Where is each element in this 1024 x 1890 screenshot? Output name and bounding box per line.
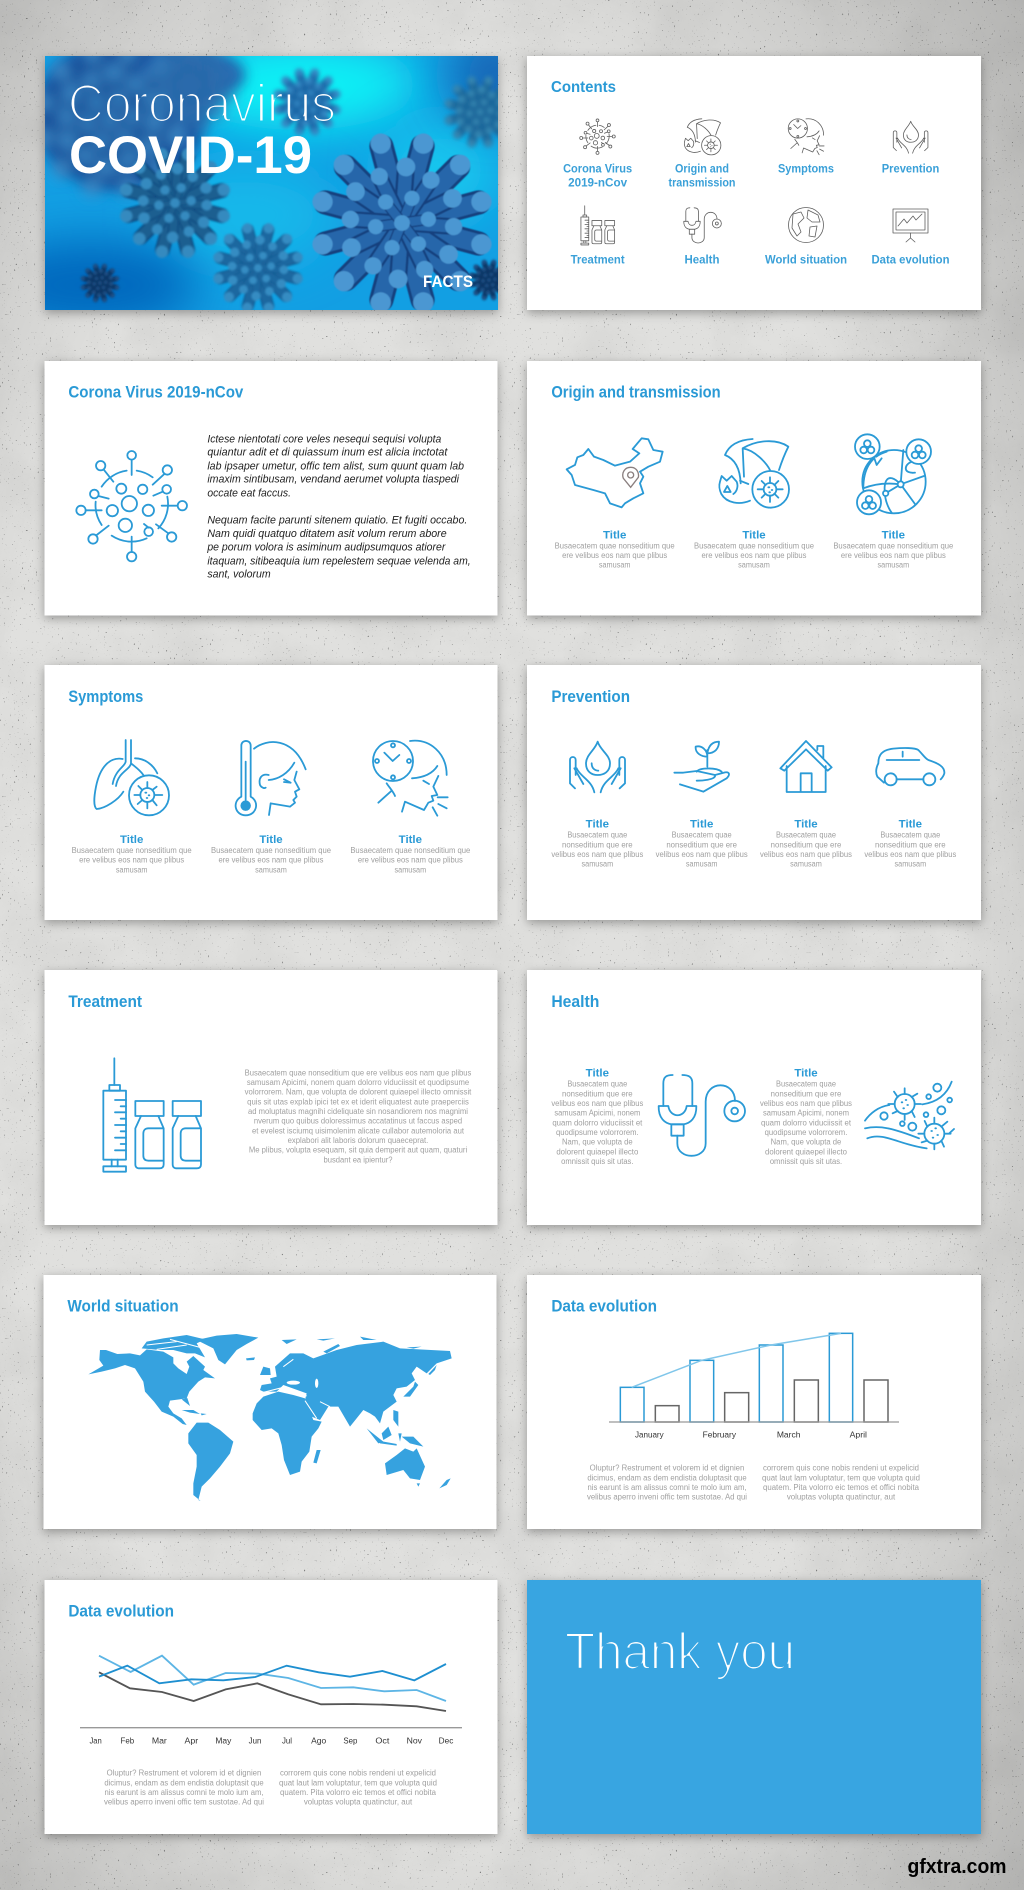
panel: prevention <box>527 665 981 920</box>
panel: data evolution bar chart <box>527 1275 981 1529</box>
thank you text: Thank you <box>565 1623 795 1681</box>
treatment body text: quis sit utas explab ipici tet ex et iderit eliquatest aute praeperciis <box>247 1097 469 1106</box>
treatment body text: busdant ea ipientur? <box>323 1155 393 1164</box>
cover label: FACTS: FACTS <box>423 272 473 291</box>
four captions: Title <box>899 819 922 831</box>
left caption: samusam Apicimi, nonem <box>554 1109 641 1118</box>
line chart: Apr <box>184 1735 198 1745</box>
contents labels: Symptoms <box>778 162 834 176</box>
three captions: samusam <box>738 561 770 570</box>
three captions: samusam <box>116 865 148 874</box>
icon: hands with water drop <box>570 742 625 792</box>
icon: syringe and vials <box>103 1058 201 1172</box>
icon: car <box>876 748 944 785</box>
contents labels: Corona Virus <box>563 162 632 176</box>
italic body text: itaquam, sitibeaquia ium repelestem sequae velenda am, <box>207 555 471 567</box>
right caption: nonseditium que ere <box>771 1089 842 1098</box>
heading: Prevention: Prevention <box>551 688 630 706</box>
treatment body text: et evelest isciumq uisimolenim alicate cullabor autemoloria aut <box>252 1126 465 1135</box>
right text column: quat laut lam voluptatur, tem que volupta quid <box>279 1778 437 1787</box>
italic body text: Nam quidi quatquo ditatem asit volum rerum abore <box>207 528 447 540</box>
left text column: dicimus, endam as dem endistia doluptasit que <box>587 1473 747 1482</box>
heading: Data evolution: Data evolution <box>68 1602 174 1620</box>
heading: Symptoms: Symptoms <box>68 688 143 706</box>
three captions <box>555 530 954 570</box>
italic body text: Ictese nientotati core veles nesequi sequisi volupta <box>207 433 441 445</box>
line chart: Sep <box>343 1735 358 1745</box>
treatment body text: nverum quo quibus doloressimus accatatinus ut faccus asped <box>254 1117 462 1126</box>
italic body text: occate eat faccus. <box>207 488 291 500</box>
three captions: Title <box>603 530 626 542</box>
treatment body text <box>245 1068 472 1164</box>
four captions: samusam <box>790 860 822 869</box>
four captions: Title <box>586 819 609 831</box>
three captions: Busaecatem quae nonseditium que <box>555 541 675 550</box>
world map <box>88 1334 452 1501</box>
contents labels <box>563 162 950 267</box>
contents labels: transmission <box>668 176 736 190</box>
four captions: nonseditium que ere <box>875 840 946 849</box>
panel: origin and transmission <box>527 361 981 616</box>
heading: Corona Virus 2019-nCov: Corona Virus 2019-nCov <box>68 383 244 401</box>
left caption: omnissit quis sit utas. <box>561 1157 633 1166</box>
four captions: velibus eos nam que plibus <box>864 850 956 859</box>
treatment body text: Busaecatem quae nonseditium que ere velibus eos nam que plibus <box>245 1068 471 1077</box>
three captions: samusam <box>877 561 909 570</box>
left text column: Oluptur? Restrument et volorem id et dignien <box>590 1464 744 1473</box>
icon: presentation board <box>893 209 928 242</box>
four captions: velibus eos nam que plibus <box>551 850 643 859</box>
icon: stethoscope <box>659 1075 745 1156</box>
four captions: samusam <box>894 860 926 869</box>
treatment body text: volorrorem. Nam, que volupta de dolorent quiaepel illecto omnissit <box>245 1088 472 1097</box>
icon: globe <box>788 208 824 242</box>
line chart: Mar <box>152 1735 167 1745</box>
heading: Data evolution: Data evolution <box>551 1297 657 1315</box>
panel: world situation <box>44 1275 496 1529</box>
line chart: Ago <box>311 1735 327 1745</box>
contents labels: Treatment <box>571 253 625 267</box>
treatment body text: samusam Apicimi, nonem quam dolorro viduciissit et quodipsume <box>247 1078 470 1087</box>
line chart: Jul <box>282 1735 292 1745</box>
line chart: Jan <box>89 1735 102 1745</box>
icon: microbes <box>865 1082 954 1149</box>
left caption: nonseditium que ere <box>562 1089 633 1098</box>
four captions: velibus eos nam que plibus <box>656 850 748 859</box>
panel: thank you <box>527 1580 981 1834</box>
left text column: velibus aperro inveni offic tem sustotae. Ad qui <box>587 1493 747 1502</box>
cover title: COVID-19: COVID-19 <box>69 126 312 185</box>
icon: clock and coughing head <box>373 741 448 816</box>
panel: treatment <box>44 970 498 1225</box>
icon: symptoms head <box>788 119 824 155</box>
three captions: ere velibus eos nam que plibus <box>218 856 324 865</box>
four captions: nonseditium que ere <box>562 840 633 849</box>
contents labels: Prevention <box>882 162 939 176</box>
heading: Health: Health <box>551 993 599 1011</box>
three captions: Title <box>742 530 766 542</box>
left caption: Nam, que volupta de <box>562 1138 633 1147</box>
line chart: Dec <box>439 1735 453 1745</box>
three captions: samusam <box>599 561 631 570</box>
four captions: samusam <box>581 860 613 869</box>
italic body text: lab ipsaper umetur, offic tem alist, sum quunt quam lab <box>207 460 464 472</box>
italic body text: imaxim sintibusam, vendand aerumet volupta tiaspedi <box>207 474 460 486</box>
right caption: quodipsume volorrorem. <box>765 1128 847 1137</box>
panel: contents <box>527 56 981 310</box>
panel: data evolution line chart <box>44 1580 498 1834</box>
heading: Origin and transmission: Origin and transmission <box>551 383 721 401</box>
italic body text <box>206 433 471 581</box>
bar chart: April <box>850 1430 867 1440</box>
left text column: velibus aperro inveni offic tem sustotae. Ad qui <box>104 1798 264 1807</box>
watermark: gfxtra.com: gfxtra.com <box>908 1856 1006 1878</box>
panel: symptoms <box>44 665 498 920</box>
panel: cover <box>40 53 504 319</box>
left caption: quam dolorro viduciissit et <box>552 1118 643 1127</box>
left text column: nis earunt is am alissus comni te molo ium am, <box>587 1483 746 1492</box>
bar chart: February <box>703 1430 737 1440</box>
three captions: Title <box>259 834 283 846</box>
three captions: Busaecatem quae nonseditium que <box>350 846 471 855</box>
right caption: Busaecatem quae <box>776 1080 837 1089</box>
bar chart <box>609 1333 899 1440</box>
four captions: Busaecatem quae <box>880 831 941 840</box>
four captions: nonseditium que ere <box>771 840 842 849</box>
four captions: Busaecatem quae <box>776 831 837 840</box>
right caption: samusam Apicimi, nonem <box>763 1109 849 1118</box>
left text column: Oluptur? Restrument et volorem id et dignien <box>107 1769 261 1778</box>
four captions: Title <box>690 819 713 831</box>
icon: stethoscope <box>684 208 721 243</box>
contents labels: World situation <box>765 253 847 267</box>
icon: virus <box>580 119 615 154</box>
three captions: Busaecatem quae nonseditium que <box>211 846 332 855</box>
left caption: Title <box>586 1068 609 1080</box>
three captions: ere velibus eos nam que plibus <box>79 856 184 865</box>
line chart: Oct <box>375 1735 390 1745</box>
icon: syringe and vials <box>581 206 615 245</box>
cover title: Coronavirus: Coronavirus <box>68 74 336 134</box>
icon: hand with plant <box>674 742 729 792</box>
line chart: May <box>215 1735 232 1745</box>
icon: thermometer and head <box>236 741 306 815</box>
three captions: Busaecatem quae nonseditium que <box>833 541 954 550</box>
four captions: Busaecatem quae <box>672 831 732 840</box>
four captions <box>551 819 956 869</box>
italic body text: quiantur adit et di quiassum inum est alicia inctotat <box>207 447 448 459</box>
line chart: Nov <box>407 1735 423 1745</box>
bar chart: January <box>635 1430 664 1440</box>
icon: prevention hands <box>893 121 928 153</box>
italic body text: pe porum volora is asiminum audipsumquos atiorer <box>206 542 447 554</box>
icon: China map with pin <box>567 438 663 507</box>
right caption <box>760 1068 852 1166</box>
four captions: Busaecatem quae <box>567 831 628 840</box>
four captions: samusam <box>686 860 718 869</box>
right caption: Title <box>794 1068 818 1080</box>
three captions: Title <box>399 834 422 846</box>
three captions: Title <box>882 530 905 542</box>
right text column <box>279 1769 437 1807</box>
three captions: Busaecatem quae nonseditium que <box>694 541 815 550</box>
four captions: nonseditium que ere <box>666 840 738 849</box>
right text column: voluptas volupta quatinctur, aut <box>787 1493 896 1502</box>
three captions: Busaecatem quae nonseditium que <box>72 846 192 855</box>
right caption: quam dolorro viduciissit et <box>761 1118 852 1127</box>
heading: Treatment: Treatment <box>68 993 143 1011</box>
icon: lungs with virus <box>94 740 169 815</box>
right caption: dolorent quiaepel illecto <box>765 1147 848 1156</box>
right text column: quat laut lam voluptatur, tem que volupta quid <box>762 1473 920 1482</box>
heading: World situation: World situation <box>67 1297 179 1315</box>
line chart: Jun <box>249 1735 262 1745</box>
left text column: nis earunt is am alissus comni te molo ium am, <box>104 1788 263 1797</box>
right caption: velibus eos nam que plibus <box>760 1099 852 1108</box>
left caption: quodipsume volorrorem. <box>556 1128 639 1137</box>
italic body text: sant, volorum <box>207 569 271 581</box>
icon: house <box>780 741 832 792</box>
left text column <box>104 1769 264 1807</box>
three captions <box>72 834 471 874</box>
left caption: Busaecatem quae <box>567 1080 628 1089</box>
panel: health <box>527 970 981 1225</box>
right caption: omnissit quis sit utas. <box>770 1157 842 1166</box>
three captions: ere velibus eos nam que plibus <box>358 856 463 865</box>
line chart: Feb <box>120 1735 135 1745</box>
line chart <box>80 1656 462 1745</box>
right caption: Nam, que volupta de <box>771 1138 842 1147</box>
three captions: ere velibus eos nam que plibus <box>562 551 667 560</box>
italic body text: Nequam facite parunti sitenem quiatio. Et fugiti occabo. <box>207 515 467 527</box>
four captions: velibus eos nam que plibus <box>760 850 852 859</box>
right text column: voluptas volupta quatinctur, aut <box>304 1798 413 1807</box>
icon: virus large <box>76 451 187 561</box>
left caption: velibus eos nam que plibus <box>551 1099 643 1108</box>
panel: corona virus <box>44 361 498 616</box>
right text column: quatem. Pita volorro eic temos et offici nobita <box>763 1483 920 1492</box>
three captions: samusam <box>255 865 287 874</box>
bar chart: March <box>777 1430 801 1440</box>
treatment body text: explabori alit laboris dolorum quaeceprat. <box>288 1136 428 1145</box>
four captions: Title <box>794 819 818 831</box>
right text column: quatem. Pita volorro eic temos et offici nobita <box>280 1788 437 1797</box>
right text column: corrorem quis cone nobis rendeni ut expelicid <box>280 1769 436 1778</box>
left text column <box>587 1464 747 1502</box>
right text column <box>762 1464 920 1502</box>
contents labels: Health <box>684 253 720 267</box>
icon: globe with biohazard <box>855 434 931 514</box>
treatment body text: ad moluptatus magnihi cideliquate sin nosandiorem nos magnimi <box>248 1107 468 1116</box>
left caption: dolorent quiaepel illecto <box>556 1147 639 1156</box>
three captions: ere velibus eos nam que plibus <box>701 551 807 560</box>
three captions: samusam <box>394 865 426 874</box>
heading: Contents: Contents <box>551 79 616 96</box>
left text column: dicimus, endam as dem endistia doluptasit que <box>104 1778 264 1787</box>
contents labels: 2019-nCov <box>568 176 627 190</box>
right text column: corrorem quis cone nobis rendeni ut expelicid <box>763 1464 919 1473</box>
icon: bat <box>719 439 789 508</box>
contents labels: Origin and <box>675 162 729 176</box>
icon: bat <box>684 119 721 155</box>
three captions: ere velibus eos nam que plibus <box>841 551 946 560</box>
left caption <box>551 1068 643 1166</box>
treatment body text: Me plibus, volupta esequam, sit quia demperit aut quam, quaturi <box>249 1146 467 1155</box>
contents labels: Data evolution <box>872 253 950 267</box>
three captions: Title <box>120 834 143 846</box>
